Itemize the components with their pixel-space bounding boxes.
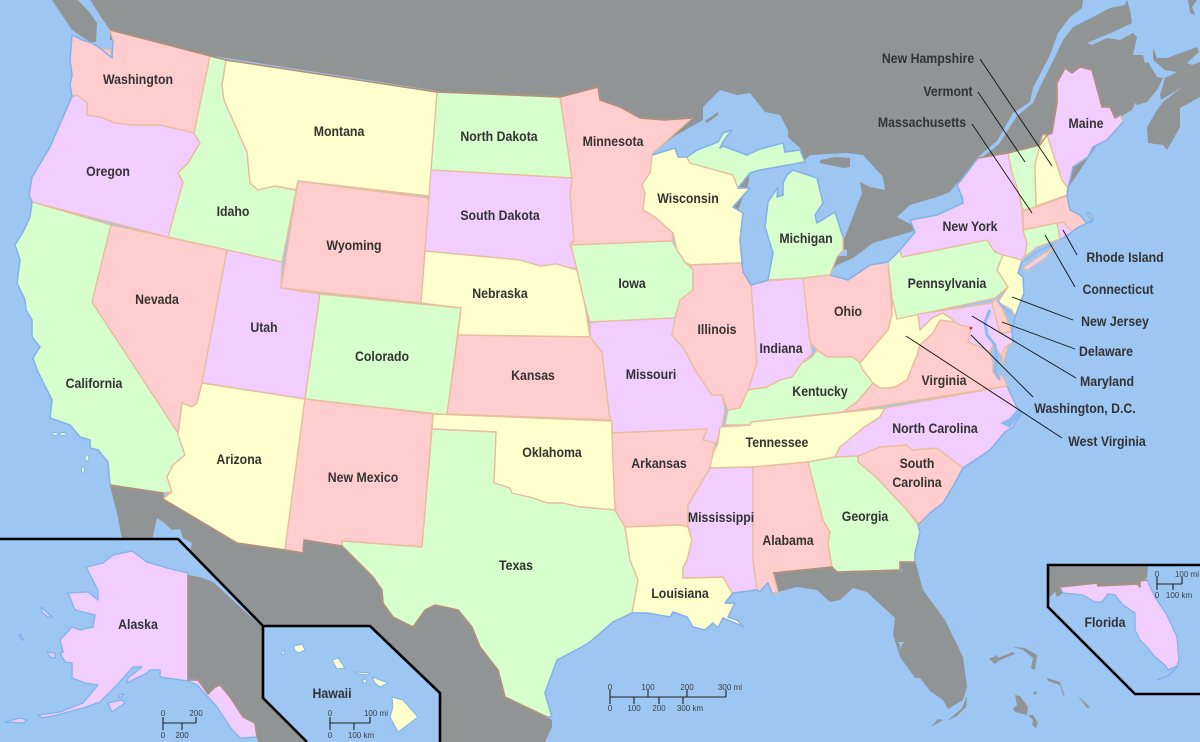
state: Tennessee [710,408,885,468]
state labels: West Virginia [1068,433,1146,449]
state: Michigan [687,130,843,280]
state labels: Washington [103,71,173,87]
state: California [15,202,185,493]
scale bar: Hawaii: 0 [328,709,333,718]
state: Texas [342,429,638,717]
state: Georgia [808,456,920,572]
scale bar: Hawaii [328,709,388,740]
Florida shape [1060,580,1179,670]
state: North Dakota [431,92,572,178]
border with Canada and Mexico [110,30,1120,717]
state: New York [900,153,1027,260]
scale bar: main map: 0 [608,683,613,692]
state: Wisconsin [642,148,750,265]
state labels: Kentucky [792,383,848,399]
state labels: Delaware [1079,343,1133,359]
state labels: New York [943,218,998,234]
state: New Hampshire [1035,135,1068,206]
scale bar: Florida: 0 [1155,591,1160,600]
state: Wyoming [281,181,429,303]
Canada-style grey Alabama/Georgia area inside inset [1049,566,1148,597]
state labels: Georgia [842,508,889,524]
state labels: Colorado [355,348,409,364]
state labels: Rhode Island [1086,249,1164,265]
state labels: Texas [499,557,533,573]
state: Massachusetts [1023,196,1093,232]
state: Rhode Island [1057,222,1072,240]
Alaska shape [5,551,257,738]
state labels: Arkansas [631,455,687,471]
scale bar: main map: 100 [627,704,641,713]
state labels: Virginia [922,372,967,388]
state labels: Indiana [759,340,803,356]
Chesapeake Bay [985,310,1000,380]
state labels: New Jersey [1081,313,1149,329]
state labels: Maine [1069,115,1103,131]
Delaware Bay [997,300,1012,314]
Tampa bay [898,642,904,650]
state: Utah [202,250,320,399]
scale bar: Florida: 100 km [1166,591,1192,600]
scale bar: Alaska: 0 [161,709,166,718]
scale bar: Alaska: 200 [175,731,189,740]
inset borders [0,539,1200,742]
state: Arizona [163,383,305,550]
state: Idaho [168,56,298,262]
state: North Carolina [835,386,1022,468]
state: West Virginia [860,297,955,388]
state labels: Vermont [923,83,973,99]
state: Connecticut [1023,223,1060,257]
state: Maryland [918,303,1013,358]
Pamlico Sound [1000,408,1022,428]
scale bar: Florida [1155,570,1199,600]
state labels: Idaho [217,203,249,219]
scale bar: main map: 200 [652,704,666,713]
state labels: North Dakota [460,128,538,144]
state: Colorado [305,294,461,415]
state labels: Tennessee [746,434,808,450]
state labels: Michigan [779,230,833,246]
state labels: Washington, D.C. [1034,400,1136,416]
state: Montana [222,60,437,196]
Canada inside the Alaska inset [188,575,307,742]
state: Iowa [571,241,693,322]
scale bar: main map: 0 [608,704,613,713]
Mexico landmass [110,486,552,742]
state labels: Wisconsin [657,190,719,206]
state: Nevada [92,225,227,433]
state: Alabama [753,462,832,593]
scale bar: main map: 300 km [677,704,703,713]
state: New Jersey [997,255,1024,317]
state labels: Arizona [216,451,262,467]
Florida mainland (grey, shown in inset) [773,560,967,709]
state labels: Illinois [698,321,736,337]
St. Lawrence river [960,0,1127,182]
scale bar: Hawaii: 0 [328,731,333,740]
scale bar: Florida: 100 mi [1175,570,1199,579]
state labels: California [66,375,123,391]
Long Island Sound [1024,243,1056,261]
state: Washington [70,30,210,133]
scale bar: Alaska: 0 [161,731,166,740]
inset: Florida [1047,565,1200,697]
state labels: Minnesota [583,133,644,149]
state: Oregon [29,95,200,237]
state labels: Mississippi [688,509,754,525]
state: Vermont [1008,145,1040,210]
state labels: Ohio [834,303,862,319]
state: South Carolina [858,445,963,525]
state labels: Missouri [626,366,676,382]
state: Mississippi [683,467,757,593]
scale bar: main map: 300 mi [718,683,742,692]
Bahamas and Florida Keys [931,647,1038,728]
California channel islands [52,432,89,473]
Gulf of California [152,518,192,552]
state: Kansas [447,335,610,420]
scale bar: Hawaii: 100 mi [364,709,388,718]
state labels: South Dakota [460,207,540,223]
Washington D.C. marker [970,327,972,329]
state labels: Kansas [511,367,555,383]
state labels: New Hampshire [882,50,974,66]
state labels: Alabama [762,532,814,548]
state labels: Pennsylvania [908,275,987,291]
state: South Dakota [425,170,577,268]
state labels: Connecticut [1082,281,1154,297]
state labels: Oklahoma [522,444,582,460]
state: Louisiana [625,525,744,630]
Bahamas in inset [1047,678,1065,697]
scale bar: main map [608,683,742,713]
state: Indiana [748,278,812,390]
state: Delaware [992,298,1012,333]
scale bar: Alaska [161,709,203,740]
state labels: Florida [1084,614,1126,630]
state: Long Island (New York) [1023,247,1055,270]
scale bar: main map: 100 [641,683,655,692]
state labels: Utah [250,319,278,335]
state: Missouri [590,318,725,443]
Canada landmass [52,0,1200,300]
scale bar: Alaska: 200 [189,709,203,718]
state labels: Montana [314,123,365,139]
state labels: Massachusetts [878,114,966,130]
state: Maine [1047,67,1123,188]
state: Pennsylvania [888,240,1008,319]
state labels: Carolina [892,474,942,490]
state labels: South [900,455,934,471]
state: Virginia eastern shore [1002,345,1008,367]
state: Virginia [843,320,1007,412]
state labels: Louisiana [651,585,709,601]
leader lines [906,59,1077,438]
Hawaiian islands [281,644,418,732]
state labels: North Carolina [892,420,978,436]
state labels: Nevada [135,291,180,307]
scale bar: Hawaii: 100 km [348,731,374,740]
state labels: Oregon [86,163,130,179]
state labels: Iowa [618,275,646,291]
scale bar: Florida: 0 [1155,570,1160,579]
Bahamas fragment [1078,696,1090,708]
inset: Hawaii [263,626,440,742]
state: Oklahoma [432,414,615,510]
state labels: Hawaii [313,685,351,701]
state: Nebraska [421,251,590,337]
state labels: Nebraska [472,285,528,301]
Florida Keys [1157,666,1178,680]
state labels: Alaska [118,616,158,632]
scale bar: main map: 200 [680,683,694,692]
inset: Alaska [0,539,307,742]
state labels: Wyoming [326,237,382,253]
state labels: Maryland [1080,373,1134,389]
state: Ohio [803,262,892,363]
state: Illinois [672,263,757,410]
state labels: New Mexico [328,469,398,485]
Great Lakes [653,90,965,290]
state: Arkansas [612,429,715,527]
state: Minnesota [560,87,692,245]
state: New Mexico [285,399,433,553]
state: Kentucky [725,350,873,425]
